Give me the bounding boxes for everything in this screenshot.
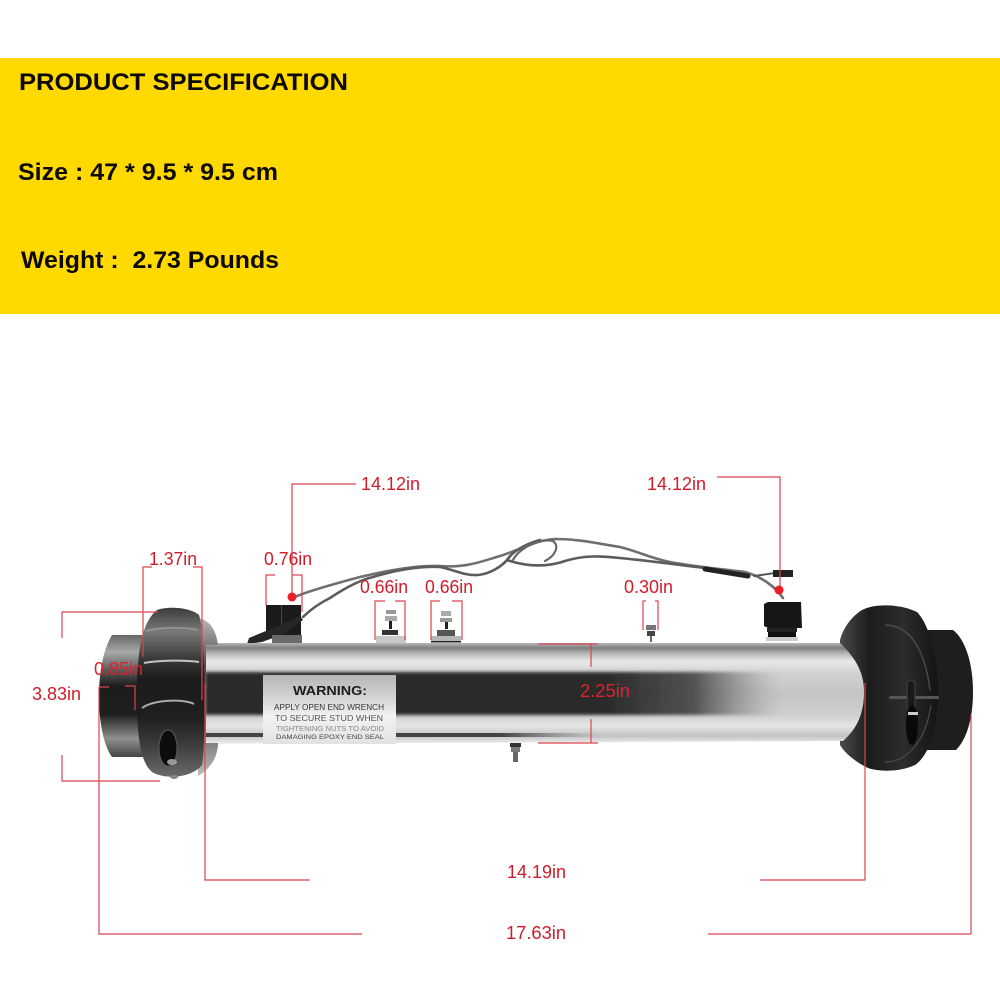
dimension: 14.12in right <box>647 474 784 594</box>
dimension: 14.19in <box>205 683 865 882</box>
dimension: 0.30in: 0.30in <box>624 577 673 597</box>
steel tube <box>205 643 864 744</box>
heading: product specification: PRODUCT SPECIFICATION <box>19 69 348 96</box>
warning label: DAMAGING EPOXY END SEAL <box>276 734 384 741</box>
right end cap <box>840 605 973 771</box>
warning label: WARNING: <box>293 683 367 698</box>
dimension: 1.37in: 1.37in <box>149 549 197 569</box>
wires <box>293 539 783 617</box>
dimension: 0.76in <box>264 549 312 612</box>
stud 2 <box>431 611 461 642</box>
warning label: TIGHTENING NUTS TO AVOID <box>276 726 384 733</box>
wire connector plug <box>773 570 793 577</box>
warning label <box>263 675 396 744</box>
dimension: second 0.66in <box>425 577 473 640</box>
stud 1 <box>376 610 406 643</box>
dimension: 14.12in right: 14.12in <box>647 474 706 494</box>
dimension: 0.30in <box>624 577 673 630</box>
left end cap <box>99 608 218 779</box>
dimension: 14.12in left: 14.12in <box>361 474 420 494</box>
dimension: second 0.66in: 0.66in <box>425 577 473 597</box>
dimension: 2.25in: 2.25in <box>580 681 630 701</box>
dimension: 17.63in <box>99 687 971 943</box>
dimension: 0.85in <box>94 659 143 710</box>
weight specification: Weight : 2.73 Pounds <box>21 247 279 274</box>
dimension: 1.37in <box>143 549 202 700</box>
size specification: Size : 47 * 9.5 * 9.5 cm <box>18 159 278 186</box>
dimension: 14.19in: 14.19in <box>507 862 566 882</box>
left probe block <box>247 605 303 644</box>
dimension: 0.85in: 0.85in <box>94 659 143 679</box>
dimension: 3.83in <box>32 612 160 781</box>
dimension: 3.83in: 3.83in <box>32 684 81 704</box>
dimension: 14.12in left <box>288 474 420 602</box>
dimension: 2.25in <box>538 644 630 743</box>
dimension: first 0.66in: 0.66in <box>360 577 408 597</box>
bottom stud <box>510 743 521 762</box>
right probe block <box>764 602 802 641</box>
warning label: TO SECURE STUD WHEN <box>275 714 383 723</box>
dimension: 17.63in: 17.63in <box>506 923 566 943</box>
heater product illustration <box>99 539 973 779</box>
dimension: first 0.66in <box>360 577 408 640</box>
stud 3 <box>646 625 656 642</box>
yellow specification band <box>0 58 1000 314</box>
dimension: 0.76in: 0.76in <box>264 549 312 569</box>
warning label: APPLY OPEN END WRENCH <box>274 703 384 712</box>
